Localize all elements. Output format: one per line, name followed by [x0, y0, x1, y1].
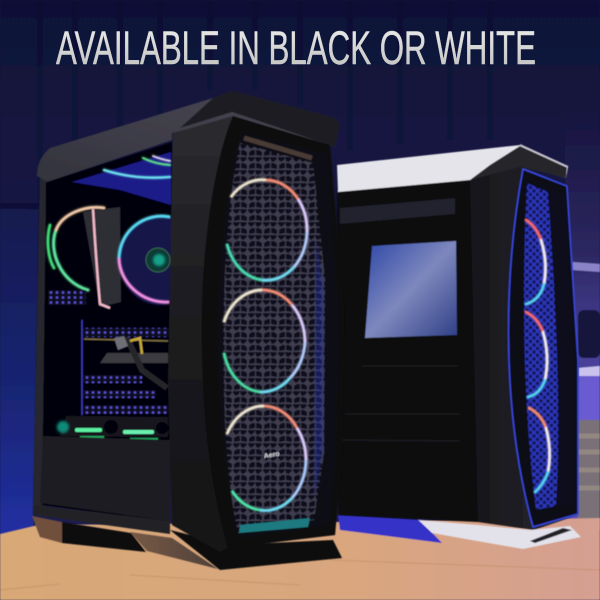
white case side body	[337, 178, 478, 522]
PSU shroud fans and lights	[57, 416, 168, 440]
top fan light arcs	[104, 156, 170, 178]
front foot	[130, 532, 218, 569]
white case top glass strip	[340, 198, 455, 224]
bottom rail	[33, 505, 170, 534]
black PC case	[32, 91, 344, 570]
left fan ring	[48, 207, 104, 290]
wooden table	[0, 515, 600, 600]
inner rim	[218, 132, 338, 538]
lower interior expansion slots	[82, 320, 168, 415]
white case top front dark underside	[470, 146, 567, 180]
front bezel	[202, 116, 344, 548]
fan logo: Aero	[263, 451, 280, 460]
graphics card and cable	[100, 336, 168, 388]
background shelves and brick wall	[565, 100, 600, 530]
mesh blue reflection	[314, 235, 324, 500]
under-case shadow	[62, 522, 146, 552]
white case front bezel	[508, 169, 578, 527]
white PC case	[337, 145, 581, 549]
white case foot	[418, 520, 581, 549]
front panel side	[168, 116, 344, 552]
fan ring 2	[224, 290, 305, 392]
fan ring 1	[227, 180, 307, 280]
right fan	[119, 215, 201, 305]
front mesh	[224, 143, 325, 533]
white case drive bay lines	[342, 366, 460, 441]
upper interior blue glow	[72, 152, 171, 205]
black case interior	[42, 142, 172, 522]
white case front panel	[470, 166, 579, 530]
left foot	[32, 516, 62, 543]
white case mesh	[524, 183, 558, 510]
white case fan rings	[526, 220, 550, 492]
cooler tower	[83, 207, 121, 307]
top panel	[37, 91, 340, 182]
PSU shroud	[40, 436, 170, 521]
fan ring 3	[227, 406, 306, 510]
mesh strip under fan	[48, 290, 86, 305]
black base	[170, 530, 342, 570]
white case top panel	[337, 145, 568, 192]
black case left edge	[33, 178, 50, 508]
white case mesh far panel	[532, 180, 574, 506]
top panel front recess	[180, 91, 340, 147]
white case side window	[365, 241, 457, 338]
